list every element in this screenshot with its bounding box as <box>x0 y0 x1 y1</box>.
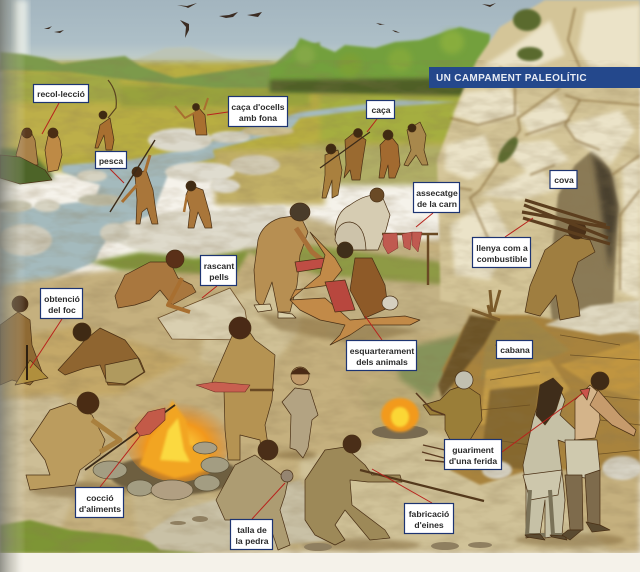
label: obtenció del foc: obtenció <box>44 294 80 304</box>
meat on skewer <box>85 405 175 470</box>
label: recol-lecció: recol-lecció <box>37 89 85 99</box>
label: assecatge de la carn: assecatge <box>416 188 458 198</box>
left page fold shadow <box>0 0 26 572</box>
label: rascant pells: rascant <box>204 261 234 271</box>
label: pesca: pesca <box>99 156 123 166</box>
label: esquarterament dels animals: esquarterament <box>350 346 414 356</box>
figure: wounded man <box>562 372 636 540</box>
hut thatch strokes <box>480 335 640 455</box>
stone flakes <box>170 516 492 551</box>
rock highlights <box>445 5 640 300</box>
bottom grass <box>0 520 205 553</box>
title banner <box>429 67 640 88</box>
label: fabricació d'eines: fabricació <box>409 509 449 519</box>
figure: cook <box>26 392 120 490</box>
label: cova <box>550 170 577 188</box>
sky <box>0 0 640 72</box>
label: cocció d'aliments: d'aliments <box>79 504 121 514</box>
birds <box>44 3 496 38</box>
label: caça d'ocells amb fona: caça d'ocells <box>231 102 285 112</box>
label: cocció d'aliments <box>76 436 140 518</box>
meadow <box>0 62 480 205</box>
figure: kneeling butcher and carcass <box>290 232 420 345</box>
label: caça d'ocells amb fona: amb fona <box>239 113 277 123</box>
label: assecatge de la carn: de la carn <box>417 199 457 209</box>
figure: stone knapper <box>216 440 293 550</box>
figure: kneeling man with tinder <box>58 323 145 385</box>
figure: fire starter <box>0 296 48 385</box>
label: guariment d'una ferida: guariment <box>452 445 494 455</box>
label: rascant pells <box>200 256 236 298</box>
label: caça d'ocells amb fona <box>207 96 288 126</box>
label: esquarterament dels animals <box>346 316 416 370</box>
cliff and cave <box>437 0 640 330</box>
figure: bird hunter <box>175 98 208 135</box>
label: talla de la pedra <box>230 483 285 550</box>
label: obtenció del foc: del foc <box>48 305 76 315</box>
rock cracks <box>440 8 640 290</box>
label: cocció d'aliments: cocció <box>86 493 114 503</box>
label: recol-lecció <box>34 84 88 134</box>
distant mountain <box>136 47 243 62</box>
label: talla de la pedra: talla de <box>237 525 267 535</box>
hut <box>438 290 640 485</box>
figure: fisher with spear <box>110 140 158 224</box>
label: cabana <box>496 340 532 358</box>
figure: tool maker <box>305 435 484 545</box>
figure: large butcher <box>254 203 325 318</box>
figure: gatherers with bush <box>0 128 62 184</box>
rock in foreground <box>143 480 330 553</box>
figure: wood carrier <box>522 200 610 320</box>
figure: bent fisher <box>184 181 212 228</box>
boulder near hut <box>482 300 640 480</box>
label: caça <box>366 100 394 132</box>
cliff plants <box>494 9 543 166</box>
label: llenya com a combustible <box>472 218 533 268</box>
label: obtenció del foc <box>30 288 82 368</box>
label: llenya com a combustible: llenya com a <box>476 243 528 253</box>
label: llenya com a combustible: combustible <box>477 254 528 264</box>
figure: child <box>282 367 318 458</box>
label: caça: caça <box>371 105 391 115</box>
figure: kneeling scraper <box>115 250 196 312</box>
label: esquarterament dels animals: dels animals <box>356 357 408 367</box>
label: guariment d'una ferida: d'una ferida <box>449 456 497 466</box>
label: cova: cova <box>554 175 574 185</box>
figure: woman with meat <box>196 317 275 460</box>
camp ground <box>0 215 640 553</box>
label: talla de la pedra: la pedra <box>236 536 269 546</box>
green patches around butchers <box>0 148 450 285</box>
river rocks <box>0 126 294 258</box>
forest right <box>270 27 490 96</box>
label: fabricació d'eines: d'eines <box>414 520 444 530</box>
figure: old person at hut <box>416 371 482 440</box>
label: assecatge de la carn <box>414 182 460 227</box>
title banner: UN CAMPAMENT PALEOLÍTIC <box>436 71 587 84</box>
label: rascant pells: pells <box>209 272 229 282</box>
ground shadows <box>30 312 625 551</box>
sky glare <box>14 0 28 60</box>
label: fabricació d'eines <box>372 469 454 534</box>
label: cabana: cabana <box>500 345 530 355</box>
label: guariment d'una ferida <box>444 393 583 470</box>
figures: hunters <box>320 122 428 198</box>
stretched hide on ground <box>158 288 250 340</box>
label: pesca <box>96 152 126 183</box>
fire pit <box>93 398 240 500</box>
river <box>0 100 456 290</box>
figure: healer woman <box>523 378 578 540</box>
figure: slinger with sling <box>95 80 116 150</box>
distant forest left <box>0 42 320 88</box>
cave opening <box>548 148 618 330</box>
small fire <box>372 398 445 462</box>
figure: butcher in white fur <box>335 188 390 250</box>
meat drying rack <box>382 232 438 285</box>
